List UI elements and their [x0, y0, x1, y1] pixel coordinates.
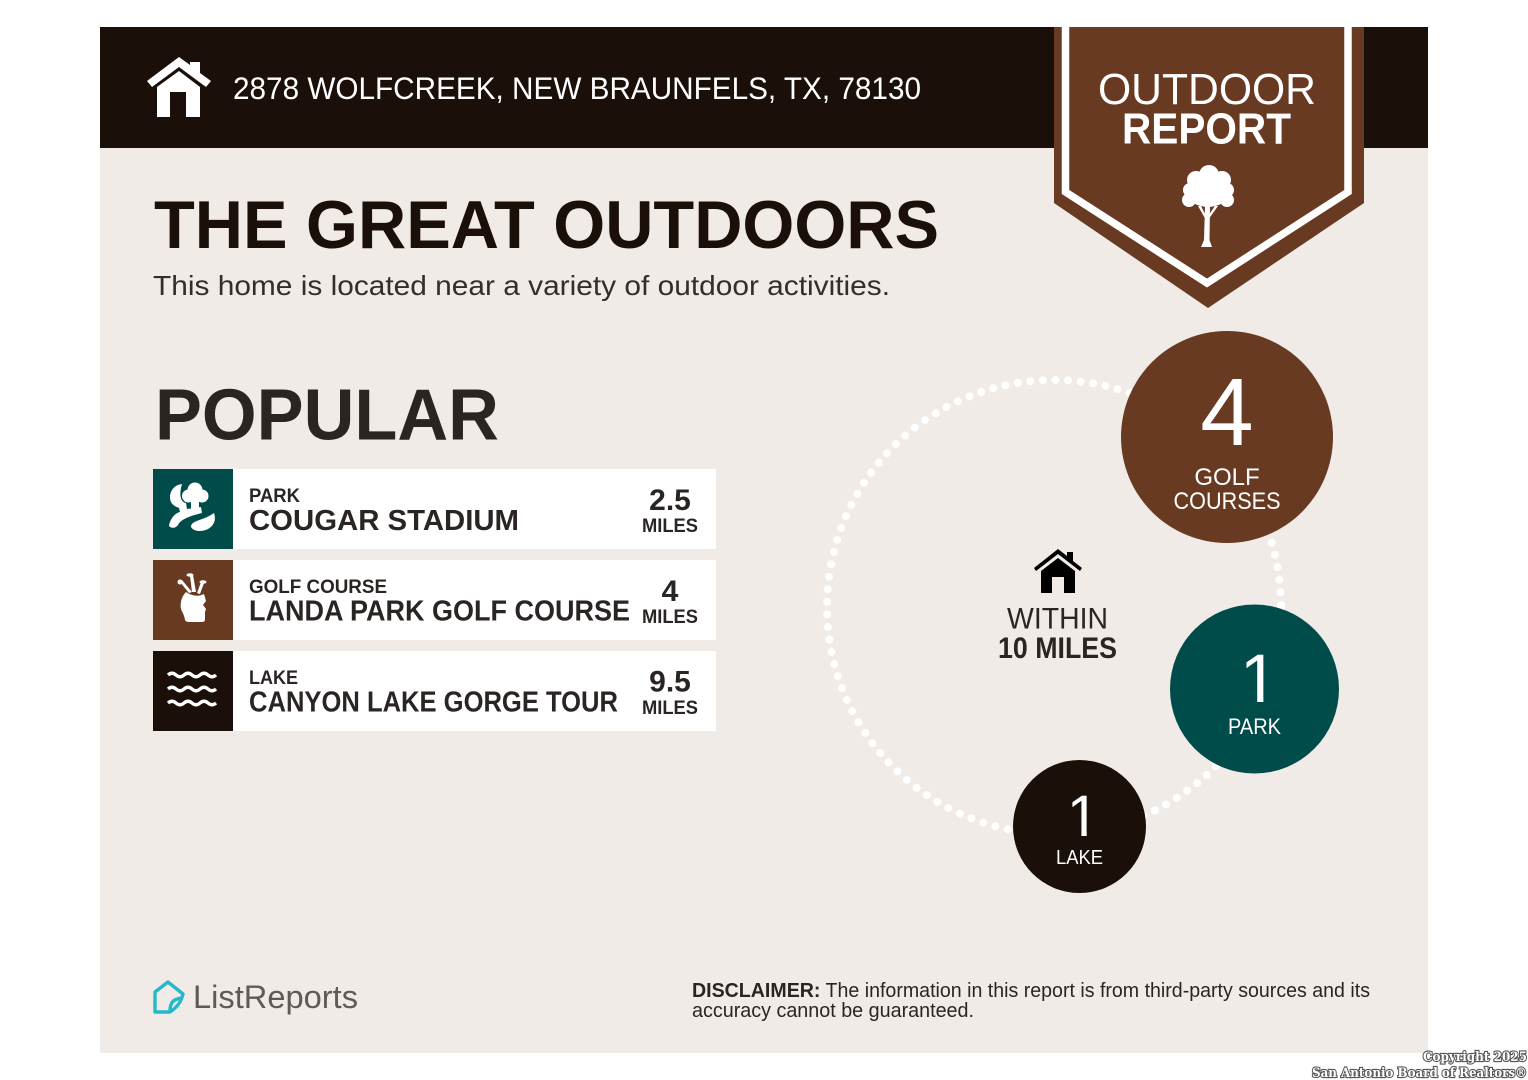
dotted ring [827, 380, 1281, 834]
icon: waves [168, 673, 216, 705]
logo wordmark: ListReports [193, 979, 358, 1015]
distance: 4 miles [642, 575, 698, 628]
icon: golf bag [178, 573, 206, 622]
address: 2878 WOLFCREEK, NEW BRAUNFELS, TX, 78130 [233, 70, 921, 106]
circle: park: PARK [1228, 714, 1281, 739]
label: golf course: GOLF COURSE [249, 577, 387, 598]
circle: park: 1 [1240, 640, 1278, 717]
subtitle: This home is located near a variety of outdoor activities. [153, 270, 890, 301]
distance: 9.5 miles: MILES [642, 698, 698, 719]
disclaimer [692, 980, 1370, 1022]
distance: 2.5 miles: MILES [642, 516, 698, 537]
copyright [1312, 1050, 1527, 1080]
distance: 9.5 miles [642, 666, 698, 719]
name: cougar stadium: COUGAR STADIUM [249, 505, 519, 537]
distance: 4 miles: MILES [642, 607, 698, 628]
title: THE GREAT OUTDOORS [154, 187, 939, 263]
header band [100, 27, 1428, 148]
label: park: PARK [249, 486, 300, 507]
icon: small house [1034, 549, 1082, 593]
distance: 2.5 miles [642, 484, 698, 537]
distance: 4 miles: 4 [662, 575, 679, 608]
circle: lake: LAKE [1056, 847, 1103, 869]
row: lake [153, 651, 716, 731]
distance: 9.5 miles: 9.5 [649, 666, 691, 698]
icon: park [169, 482, 215, 531]
disclaimer: accuracy cannot be guaranteed. [692, 1000, 974, 1022]
icon: logo mark [155, 982, 183, 1012]
distance: 2.5 miles: 2.5 [649, 484, 691, 517]
circle: park [1170, 604, 1339, 774]
disclaimer: DISCLAIMER: The information in this report is from third-party sources and its [692, 980, 1370, 1002]
icon: house [147, 57, 211, 117]
within label: WITHIN [1007, 602, 1108, 636]
icon: tree [1182, 165, 1234, 247]
badge title: OUTDOOR [1098, 65, 1316, 114]
circle: lake [1013, 760, 1146, 893]
name: canyon lake gorge tour: CANYON LAKE GORGE TOUR [249, 686, 618, 718]
circle: golf courses: COURSES [1174, 488, 1280, 515]
heading: popular: POPULAR [155, 376, 499, 456]
row: golf course [153, 560, 716, 640]
within distance: 10 MILES [998, 632, 1117, 665]
circle: golf courses [1121, 331, 1333, 543]
circle: golf courses: GOLF [1194, 464, 1260, 491]
row: park [153, 469, 716, 549]
badge: outdoor report [1054, 27, 1364, 308]
circle: lake: 1 [1067, 784, 1099, 849]
name: landa park golf course: LANDA PARK GOLF COURSE [249, 596, 630, 628]
label: lake: LAKE [249, 668, 298, 689]
circle: golf courses: 4 [1200, 359, 1254, 466]
badge subtitle: REPORT [1122, 104, 1291, 154]
logo: listreports [155, 979, 358, 1015]
